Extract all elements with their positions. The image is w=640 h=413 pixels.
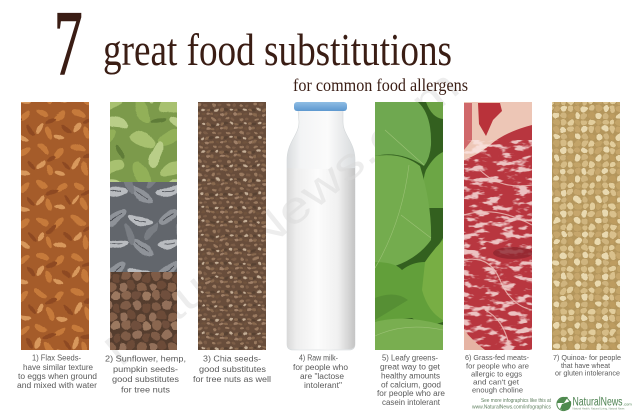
caption 4: for people who <box>293 363 349 372</box>
panel: quinoa <box>552 102 620 350</box>
caption 7: 7) Quinoa- for people <box>553 353 621 362</box>
milk <box>287 168 355 349</box>
bottle cap <box>294 102 347 111</box>
caption 3 <box>193 354 271 384</box>
caption 1: and mixed with water <box>17 381 97 390</box>
caption 7: or gluten intolerance <box>555 369 620 378</box>
caption 1: 1) Flax Seeds- <box>32 354 81 362</box>
caption 7 <box>553 353 621 378</box>
logo wordmark: NaturalNews <box>572 396 623 408</box>
bottle glass <box>287 110 355 350</box>
caption 2: 2) Sunflower, hemp, <box>105 354 186 364</box>
marbling <box>464 140 532 350</box>
fat cap <box>464 102 532 160</box>
caption 6: allergic to eggs <box>471 369 522 378</box>
panel: leafy greens <box>375 102 443 350</box>
pumpkin seeds <box>110 102 177 182</box>
caption 2 <box>105 354 186 394</box>
footer link text <box>472 398 552 410</box>
caption 6: enough choline <box>472 386 523 395</box>
central leaf <box>375 155 431 272</box>
sunflower seeds <box>110 182 177 272</box>
lower fat corner <box>464 330 485 350</box>
lower leaves <box>375 238 443 324</box>
footer link text: See more infographics like this at <box>481 398 552 404</box>
caption 2: good substitutes <box>112 374 179 384</box>
caption 3: 3) Chia seeds- <box>203 354 261 364</box>
caption 4: 4) Raw milk- <box>299 354 338 362</box>
caption 4: are "lactose <box>300 372 345 381</box>
title <box>54 0 468 95</box>
caption 5: casein intolerant <box>382 398 441 407</box>
caption 3: good substitutes <box>199 364 266 374</box>
caption 2: pumpkin seeds- <box>113 364 178 374</box>
caption 5: healthy amounts <box>381 372 440 380</box>
logo: NaturalNews <box>557 396 632 411</box>
logo suffix: .com <box>623 402 632 406</box>
caption 5: 5) Leafy greens- <box>382 354 438 362</box>
caption 2: for tree nuts <box>121 384 170 394</box>
panel: pumpkin, sunflower and hemp seeds <box>110 102 177 350</box>
main heading: great food substitutions <box>103 25 452 75</box>
caption 6: 6) Grass-fed meats- <box>465 353 530 362</box>
caption 3: for tree nuts as well <box>193 374 271 384</box>
caption 5: of calcium, good <box>381 380 441 390</box>
top leaf <box>375 102 431 166</box>
panel: chia seeds <box>198 102 266 350</box>
hemp seeds <box>110 272 177 350</box>
caption 6: for people who are <box>466 361 529 370</box>
panel: flax seeds <box>21 102 89 350</box>
icon: globe leaf <box>557 397 571 411</box>
logo tagline: Natural Health, Natural Living, Natural News <box>572 406 625 410</box>
leaf veins <box>375 130 443 336</box>
panel: grass-fed meat <box>464 102 533 350</box>
footer link text: www.NaturalNews.com/infographics <box>472 404 551 410</box>
caption 5: for people who are <box>377 389 446 398</box>
caption 7: that have wheat <box>561 361 610 370</box>
dark patch <box>493 247 533 259</box>
watermark: NaturalNews.com <box>95 61 468 376</box>
caption 1: to eggs when ground <box>18 372 97 381</box>
caption 5 <box>377 354 446 407</box>
caption 1: have similar texture <box>23 363 94 372</box>
caption 6 <box>465 353 530 395</box>
subtitle: for common food allergens <box>293 75 468 95</box>
panel: milk bottle <box>287 102 355 350</box>
caption 6: and can't get <box>473 377 519 386</box>
caption 1 <box>17 354 97 390</box>
caption 4: intolerant" <box>304 381 342 390</box>
right side leaf lobes <box>426 102 443 119</box>
caption 4 <box>293 354 349 390</box>
caption 5: great way to get <box>380 362 441 372</box>
